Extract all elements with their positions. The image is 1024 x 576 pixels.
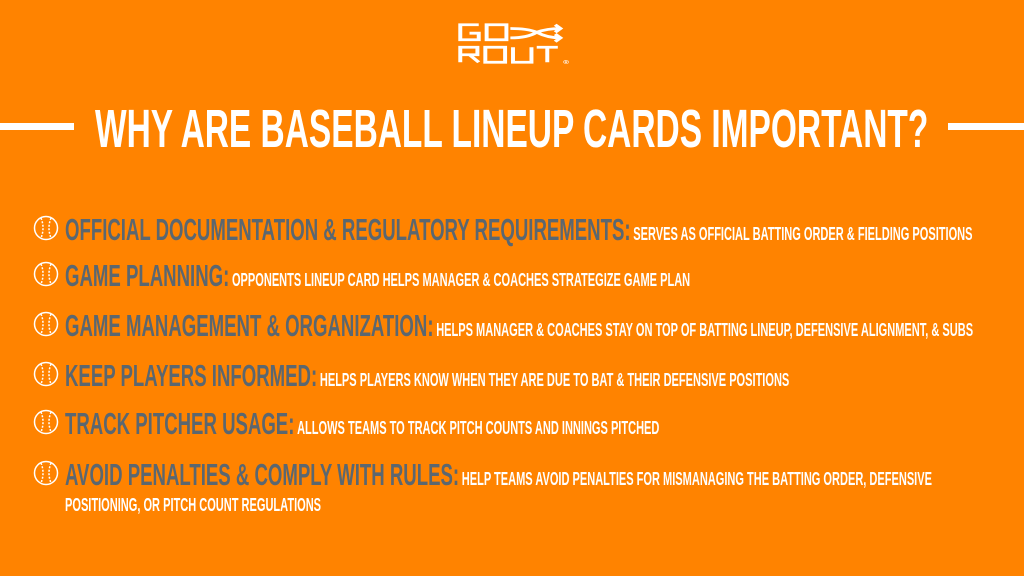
logo	[458, 23, 569, 66]
item 4: KEEP PLAYERS INFORMED: HELPS PLAYERS KNOW WHEN THEY ARE DUE TO BAT & THEIR DEFENSIVE POSITIONS	[65, 358, 789, 393]
item 1: OFFICIAL DOCUMENTATION & REGULATORY REQUIREMENTS: SERVES AS OFFICIAL BATTING ORDER & FIELDING POSITIONS	[65, 212, 972, 247]
logo: ®	[563, 59, 569, 66]
title: WHY ARE BASEBALL LINEUP CARDS IMPORTANT?	[95, 99, 928, 159]
icon: baseball	[34, 312, 58, 336]
item 6: AVOID PENALTIES & COMPLY WITH RULES: HELP TEAMS AVOID PENALTIES FOR MISMANAGING THE BATTING ORDER, DEFENSIVE	[65, 457, 932, 492]
icon: baseball	[34, 262, 58, 286]
item 5: TRACK PITCHER USAGE: ALLOWS TEAMS TO TRACK PITCH COUNTS AND INNINGS PITCHED	[65, 406, 659, 441]
icon: baseball	[34, 410, 58, 434]
icon: baseball	[34, 362, 58, 386]
item 2: GAME PLANNING: OPPONENTS LINEUP CARD HELPS MANAGER & COACHES STRATEGIZE GAME PLAN	[65, 258, 690, 293]
title rule left	[0, 123, 74, 130]
icon: baseball	[34, 216, 58, 240]
item 3: GAME MANAGEMENT & ORGANIZATION: HELPS MANAGER & COACHES STAY ON TOP OF BATTING LINEUP, DEFENSIVE ALIGNMENT, & SUBS	[65, 308, 973, 343]
item 6: POSITIONING, OR PITCH COUNT REGULATIONS	[65, 494, 321, 515]
icon: baseball	[34, 460, 58, 486]
item 6	[34, 457, 932, 515]
title rule right	[948, 123, 1024, 130]
